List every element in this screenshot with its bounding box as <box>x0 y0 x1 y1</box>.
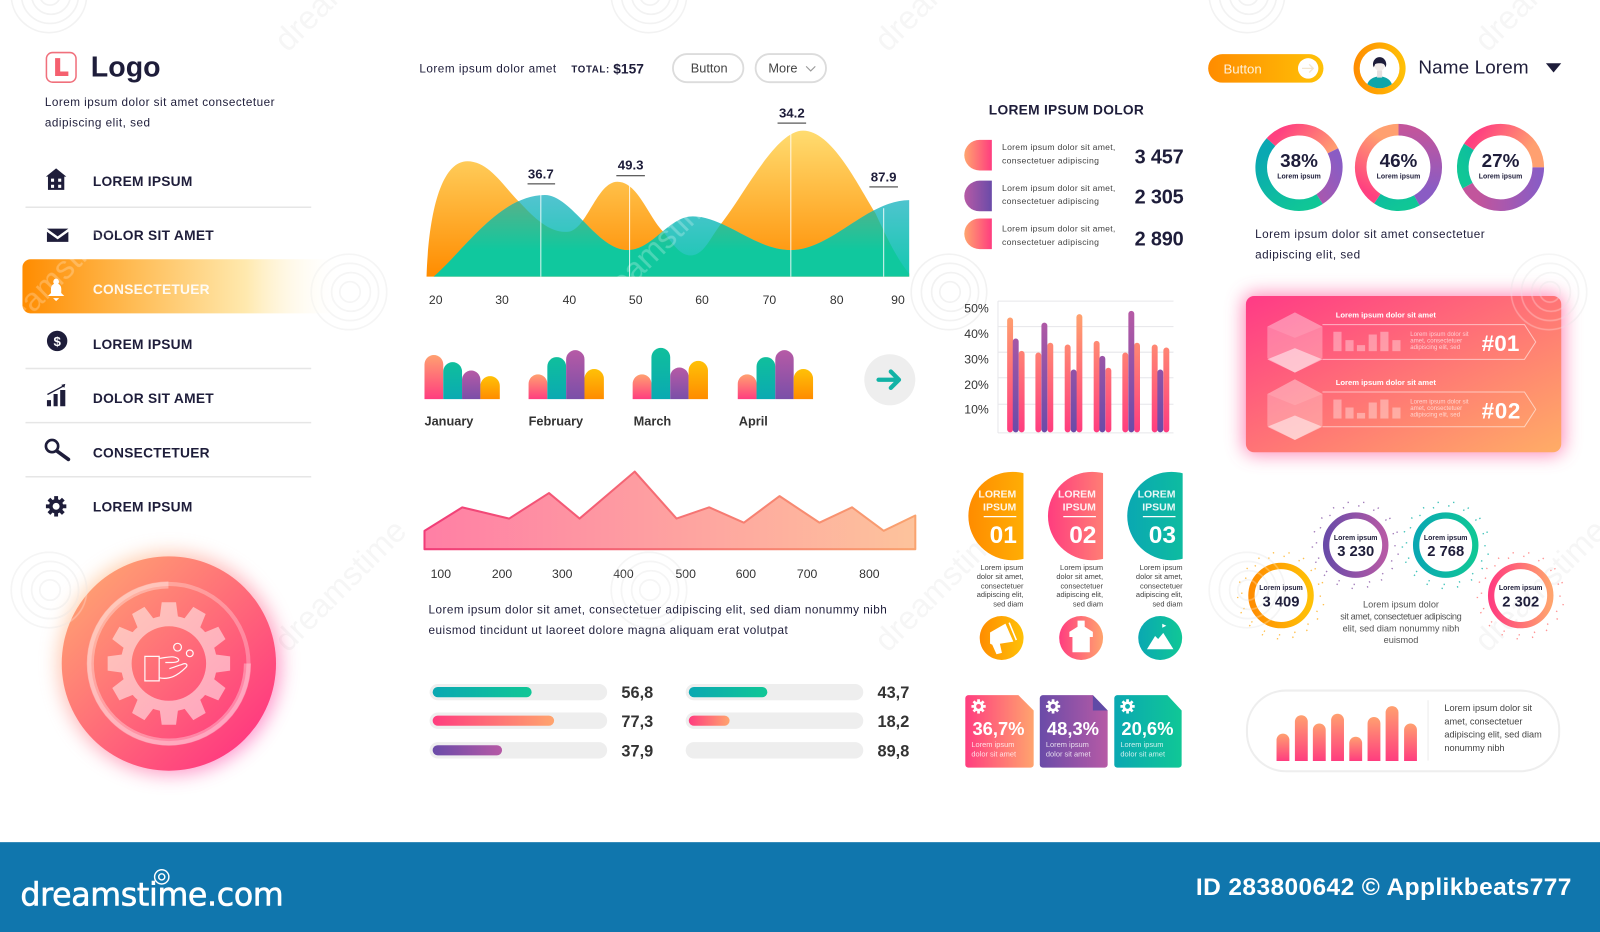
stat list: Lorem ipsum dolor sit amet, <box>1002 142 1115 152</box>
stat list: consectetuer adipiscing <box>1002 155 1099 165</box>
footer banner <box>0 842 1600 932</box>
numbered column 03: adipiscing elit, <box>1136 590 1183 599</box>
icon: dollar <box>47 331 67 351</box>
text: dreamstime <box>867 512 1013 658</box>
ring stats caption <box>1340 600 1462 645</box>
ring stats caption: euismod <box>1384 635 1418 645</box>
percent card 2 <box>1040 695 1108 768</box>
numbered column 02: Lorem ipsum <box>1060 563 1103 572</box>
menu item: lorem ipsum: LOREM IPSUM <box>93 337 193 352</box>
donut 38%: 38% <box>1280 151 1318 172</box>
x axis <box>431 567 880 581</box>
ranking row 01: amet, consectetuer <box>1410 337 1462 344</box>
pill bar chart: nonummy nibh <box>1444 743 1505 753</box>
x axis: 200 <box>492 567 512 581</box>
percent card 3: Lorem ipsum <box>1120 740 1163 749</box>
ring stat 2 302: Lorem ipsum <box>1499 585 1542 592</box>
donut 46%: Lorem ipsum <box>1377 174 1420 181</box>
march <box>633 348 708 429</box>
ranking row 02: Lorem ipsum dolor sit <box>1410 399 1469 406</box>
donut caption: adipiscing elit, sed <box>1255 248 1360 261</box>
button <box>673 54 743 82</box>
numbered column 03: Lorem ipsum <box>1140 563 1183 572</box>
ranking row 02 <box>1267 378 1536 440</box>
footer brand: dreamstime.com <box>20 877 284 913</box>
menu item: consectetuer: CONSECTETUER <box>93 445 210 460</box>
value labels: 87.9 <box>871 170 897 185</box>
numbered column 01: IPSUM <box>983 501 1017 513</box>
numbered column 01: consectetuer <box>981 581 1024 590</box>
grouped bar chart: 30% <box>964 352 989 366</box>
value labels: 49.3 <box>618 157 644 172</box>
ranking row 01: Lorem ipsum dolor sit amet <box>1336 310 1436 319</box>
stat list: consectetuer adipiscing <box>1002 237 1099 247</box>
ring stat 2 302 <box>1477 552 1564 639</box>
ranking row 01: Lorem ipsum dolor sit <box>1410 331 1469 338</box>
donut 27%: 27% <box>1482 151 1520 172</box>
x axis: 500 <box>676 567 696 581</box>
icon: magnifier <box>46 440 68 459</box>
ranking row 02: Lorem ipsum dolor sit amet <box>1336 378 1436 387</box>
donut 27% <box>1448 115 1553 220</box>
numbered column 01: sed diam <box>993 599 1023 608</box>
numbered column 03: 03 <box>1149 522 1176 549</box>
stat list: consectetuer adipiscing <box>1002 196 1099 206</box>
heading: lorem ipsum dolor: LOREM IPSUM DOLOR <box>989 102 1144 117</box>
area chart <box>427 105 909 307</box>
icon: podium <box>1059 616 1103 660</box>
monthly bars <box>424 348 915 429</box>
pill bar chart: adipiscing elit, sed diam <box>1444 730 1542 740</box>
icon: growth chart <box>47 384 65 406</box>
icon: arrow button <box>864 354 915 405</box>
numbered column 01 <box>968 472 1024 660</box>
february: February <box>529 414 584 429</box>
february <box>529 350 604 429</box>
numbered column 02: sed diam <box>1073 599 1103 608</box>
user name: Name Lorem <box>1418 57 1529 78</box>
logo <box>46 52 161 84</box>
x axis: 40 <box>563 293 576 307</box>
stat list: 3 457 <box>1135 146 1184 168</box>
ring stats caption: sit amet, consectetuer adipiscing <box>1340 612 1462 622</box>
ring stat 3 230 <box>1312 502 1399 588</box>
grouped bar chart: 10% <box>964 402 989 416</box>
more button <box>756 54 826 82</box>
ring stat 3 230: Lorem ipsum <box>1334 535 1377 542</box>
numbered column 02: adipiscing elit, <box>1056 590 1103 599</box>
icon: gear <box>46 496 66 517</box>
x axis: 80 <box>830 293 844 307</box>
pink line area chart <box>424 472 915 581</box>
progress bars: 43,7 <box>878 684 909 702</box>
progress bars: 89,8 <box>878 742 909 760</box>
pill bar chart <box>1247 691 1559 771</box>
numbered column 01: LOREM <box>978 489 1017 501</box>
big gear badge <box>58 552 281 775</box>
numbered column 01: dolor sit amet, <box>977 572 1023 581</box>
progress bars: 56,8 <box>621 684 653 702</box>
pill bar chart: Lorem ipsum dolor sit <box>1444 703 1532 713</box>
donut 46%: 46% <box>1380 151 1418 172</box>
menu item: active consectetuer: CONSECTETUER <box>93 282 210 297</box>
stat list <box>964 140 1184 251</box>
donut caption <box>1255 228 1485 261</box>
x axis: 100 <box>431 567 451 581</box>
numbered column 02: IPSUM <box>1063 501 1096 513</box>
more button: More <box>768 60 797 75</box>
toggle button: Button <box>1223 61 1262 76</box>
numbered column 03: LOREM <box>1138 489 1176 501</box>
icon: dollar: $ <box>53 334 61 349</box>
grouped bar chart: 40% <box>964 327 989 341</box>
top summary bar: Lorem ipsum dolor amet <box>419 62 557 75</box>
progress bars <box>430 684 909 760</box>
percent card 3: dolor sit amet <box>1120 749 1166 758</box>
numbered column 01: Lorem ipsum <box>980 563 1023 572</box>
numbered column 02: consectetuer <box>1060 581 1104 590</box>
menu item: lorem ipsum: LOREM IPSUM <box>93 499 193 514</box>
x axis: 60 <box>695 293 709 307</box>
user avatar <box>1354 42 1406 94</box>
logo description: Lorem ipsum dolor sit amet consectetuer <box>45 96 275 109</box>
grouped bar chart <box>964 301 1173 433</box>
percent card 1: Lorem ipsum <box>971 740 1014 749</box>
numbered column 02 <box>1048 472 1104 660</box>
x axis: 800 <box>859 567 880 581</box>
paragraph <box>429 604 887 637</box>
numbered column 03: consectetuer <box>1140 581 1183 590</box>
numbered column 03: dolor sit amet, <box>1136 572 1183 581</box>
ring stats caption: Lorem ipsum dolor <box>1363 600 1439 610</box>
icon: hand with coins <box>145 643 193 681</box>
ring stat 3 409: Lorem ipsum <box>1259 585 1303 592</box>
gradient ranking card <box>1244 294 1563 454</box>
donut 46% <box>1346 115 1451 220</box>
x axis: 20 <box>429 293 443 307</box>
icon: mountain flag <box>1138 616 1182 660</box>
value labels: 36.7 <box>528 167 554 182</box>
x axis: 70 <box>763 293 776 307</box>
ranking row 02: amet, consectetuer <box>1410 405 1462 412</box>
percent card 2: Lorem ipsum <box>1046 740 1089 749</box>
numbered column 03 <box>1127 472 1183 660</box>
ring stat 3 409: 3 409 <box>1263 594 1300 610</box>
ring stat 2 768: 2 768 <box>1427 544 1464 560</box>
menu item: dolor sit amet: DOLOR SIT AMET <box>93 391 214 406</box>
top summary bar <box>419 54 826 82</box>
ranking row 01 <box>1267 310 1536 373</box>
menu item: lorem ipsum: LOREM IPSUM <box>93 174 193 189</box>
stat list: 2 890 <box>1135 229 1184 251</box>
donut caption: Lorem ipsum dolor sit amet consectetuer <box>1255 228 1485 241</box>
ranking row 02: #02 <box>1482 399 1520 424</box>
ring stat 3 409 <box>1238 552 1324 639</box>
toggle button <box>1208 54 1323 83</box>
donut 38%: Lorem ipsum <box>1277 174 1321 181</box>
numbered column 01: 01 <box>990 522 1017 549</box>
ring stat 3 230: 3 230 <box>1337 544 1374 560</box>
progress bars: 37,9 <box>621 742 653 760</box>
x axis: 400 <box>613 567 634 581</box>
logo: Logo <box>91 52 161 84</box>
button: Button <box>691 60 728 75</box>
value labels: 34.2 <box>779 105 805 120</box>
stat list: Lorem ipsum dolor sit amet, <box>1002 183 1115 193</box>
ring stat 2 302: 2 302 <box>1502 594 1539 610</box>
stat list: 2 305 <box>1135 187 1184 209</box>
grouped bar chart: 50% <box>964 301 989 315</box>
progress bars: 18,2 <box>878 713 909 731</box>
january <box>424 355 500 429</box>
paragraph: euismod tincidunt ut laoreet dolore magna aliquam erat volutpat <box>429 624 788 637</box>
numbered column 01: adipiscing elit, <box>977 590 1023 599</box>
percent card 1: 36,7% <box>972 718 1024 739</box>
numbered column 03: IPSUM <box>1142 501 1176 513</box>
march: March <box>634 414 671 429</box>
top summary bar: $157 <box>613 61 644 76</box>
grouped bar chart: 20% <box>964 378 989 392</box>
ranking row 01: adipiscing elit, sed <box>1410 344 1460 351</box>
value labels <box>528 105 898 188</box>
icon: house <box>46 168 66 190</box>
icon: megaphone <box>980 616 1024 660</box>
x axis: 600 <box>736 567 756 581</box>
x axis: 300 <box>552 567 573 581</box>
ranking row 01: #01 <box>1482 331 1519 356</box>
april <box>738 350 813 429</box>
navigation menu <box>26 168 311 517</box>
logo description: adipiscing elit, sed <box>45 117 150 130</box>
ring stats caption: elit, sed diam nonummy nibh <box>1343 623 1459 633</box>
pill bar chart: amet, consectetuer <box>1444 716 1522 726</box>
donut 27%: Lorem ipsum <box>1479 174 1522 181</box>
percent card 2: dolor sit amet <box>1046 749 1091 758</box>
x axis: 30 <box>495 293 509 307</box>
numbered column 03: sed diam <box>1152 599 1183 608</box>
top summary bar: TOTAL: <box>571 64 609 75</box>
paragraph: Lorem ipsum dolor sit amet, consectetuer adipiscing elit, sed diam nonummy nibh <box>429 604 887 617</box>
icon: envelope <box>47 229 68 242</box>
percent card 2: 48,3% <box>1047 718 1099 739</box>
percent card 3 <box>1114 695 1182 768</box>
x axis: 90 <box>891 293 905 307</box>
logo description <box>45 96 275 130</box>
percent card 1 <box>965 695 1034 768</box>
footer image id: ID 283800642 © Applikbeats777 <box>1196 874 1571 901</box>
percent card 1: dolor sit amet <box>971 749 1017 758</box>
ranking row 02: adipiscing elit, sed <box>1410 411 1460 418</box>
ring stat 2 768: Lorem ipsum <box>1424 535 1467 542</box>
ring stat 2 768 <box>1402 502 1489 588</box>
menu item: dolor sit amet: DOLOR SIT AMET <box>93 228 214 243</box>
numbered column 02: dolor sit amet, <box>1056 572 1103 581</box>
x axis: 50 <box>629 293 643 307</box>
active menu highlight <box>22 259 342 313</box>
percent card 3: 20,6% <box>1121 718 1173 739</box>
donut 38% <box>1246 114 1352 221</box>
january: January <box>424 414 474 429</box>
icon: bell <box>48 279 64 301</box>
stat list: Lorem ipsum dolor sit amet, <box>1002 224 1115 234</box>
x axis <box>429 293 905 307</box>
april: April <box>739 414 768 429</box>
numbered column 02: 02 <box>1069 522 1096 549</box>
text: dreamstime <box>581 175 728 321</box>
numbered column 02: LOREM <box>1058 489 1096 501</box>
progress bars: 77,3 <box>621 713 653 731</box>
x axis: 700 <box>797 567 818 581</box>
text: dreamstime <box>267 512 413 658</box>
